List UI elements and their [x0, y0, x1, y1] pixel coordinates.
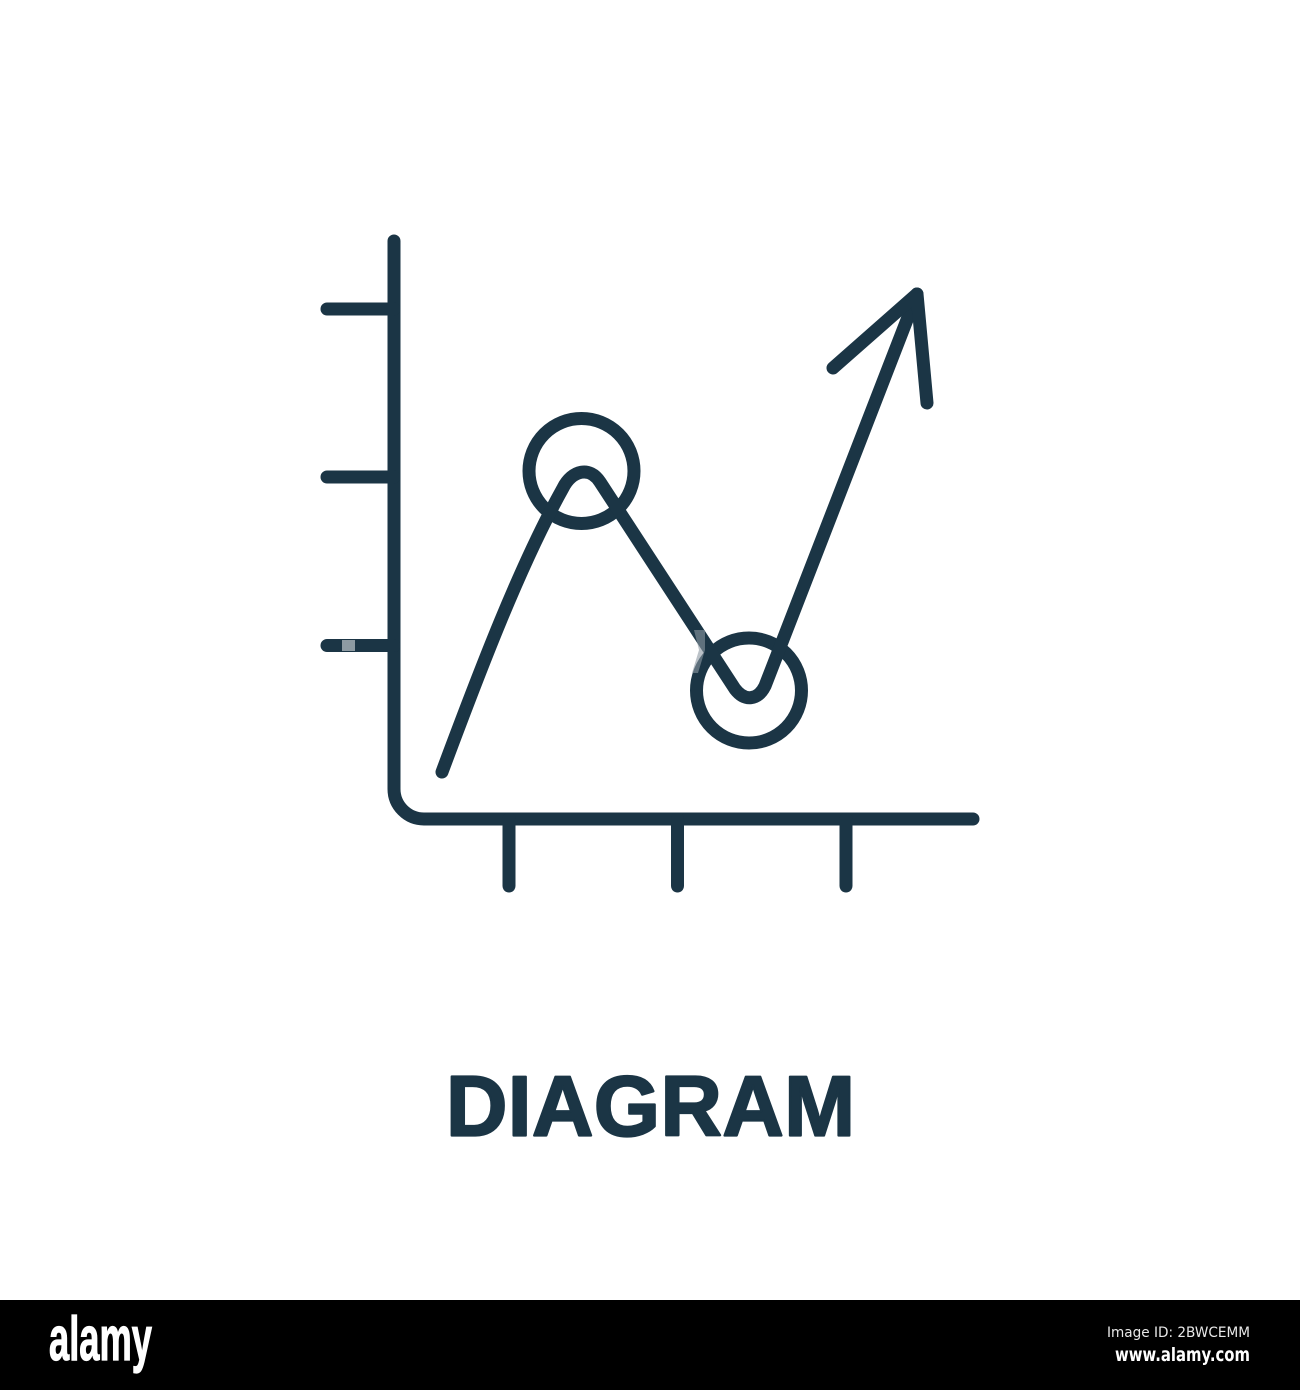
arrow head: [833, 294, 927, 403]
trend line with arrow shaft: [442, 294, 917, 772]
footer band: [0, 1300, 1300, 1390]
chart axes: [394, 241, 973, 819]
highlight circle: peak: [529, 418, 634, 524]
footer logo: alamy: [49, 1305, 152, 1374]
highlight circle: trough: [696, 638, 802, 743]
watermark fragment on line: [692, 630, 705, 673]
icon: line chart diagram: [327, 241, 973, 886]
website url: www.alamy.com: [1115, 1344, 1250, 1366]
x-axis tick marks: [509, 819, 846, 886]
image id: Image ID: 2BWCEMM: [1107, 1325, 1250, 1341]
watermark fragment on tick: [342, 640, 355, 651]
title: DIAGRAM: [446, 1060, 855, 1154]
y-axis tick marks: [327, 309, 394, 646]
